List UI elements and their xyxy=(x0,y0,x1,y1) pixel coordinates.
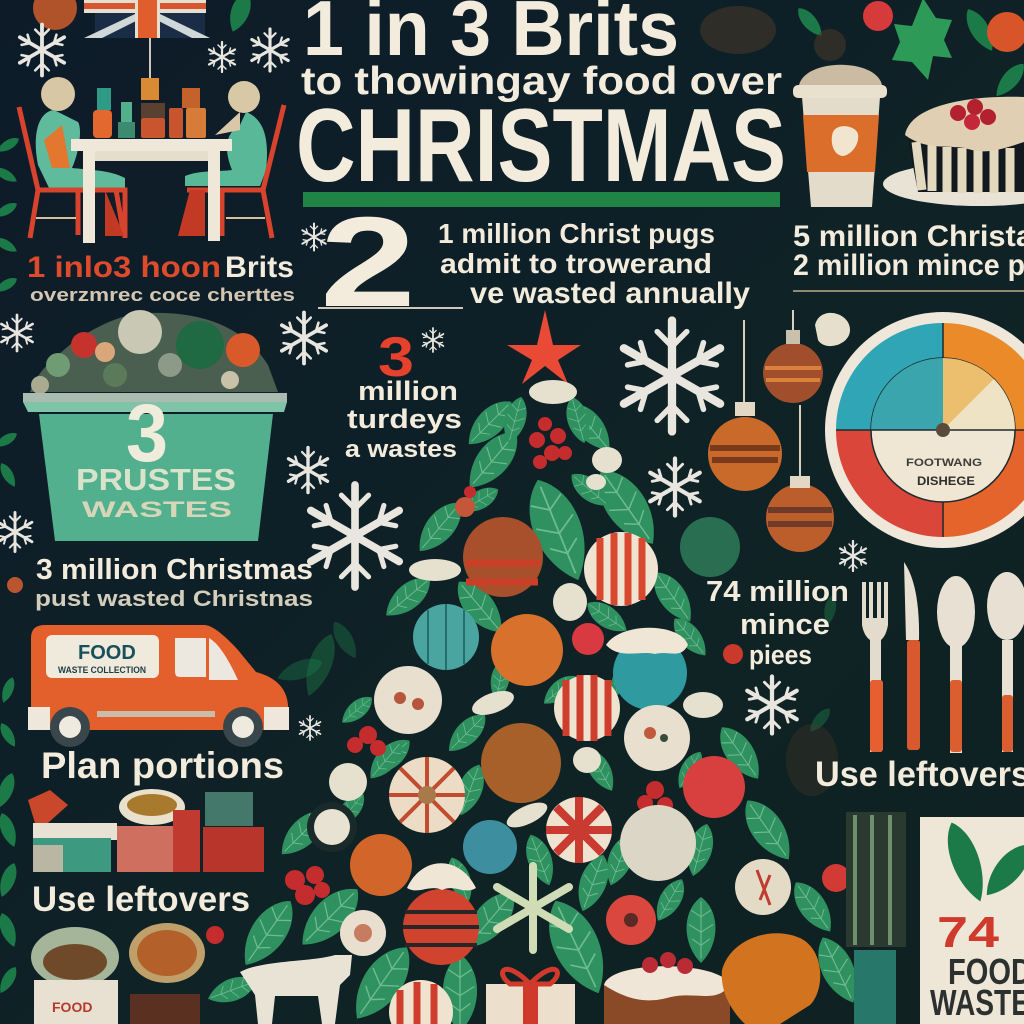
stat: 2 million christmas puddings: 1 million Christ pugs xyxy=(438,218,715,249)
illustration: roast turkey xyxy=(722,933,820,1024)
tree star xyxy=(507,310,581,384)
illustration: leftovers dishes xyxy=(31,923,224,1024)
title: CHRISTMAS xyxy=(296,88,786,204)
top white blooms xyxy=(329,380,723,832)
icon: cutlery xyxy=(862,562,1024,753)
illustration: green food waste bin xyxy=(23,310,287,541)
illustration: food dishes and shops xyxy=(28,789,264,872)
stat: 1 in 3 brits: overzmrec coce cherttes xyxy=(30,285,295,305)
illustration: green food waste bin: 3 xyxy=(126,388,168,479)
stat: 3 million turkeys: turdeys xyxy=(347,404,462,434)
stat: 1 in 3 brits xyxy=(27,251,295,305)
chart: pie gauge: FOOTWANG xyxy=(906,457,982,469)
illustration: orange food van: WASTE COLLECTION xyxy=(58,665,146,675)
stat: 3 million turkeys: million xyxy=(358,376,458,406)
illustration: orange food van: FOOD xyxy=(78,642,136,664)
stat: 1 in 3 brits: 1 inlo3 hoon xyxy=(27,251,221,284)
icon: coffee cup xyxy=(793,65,887,207)
tree foliage xyxy=(204,393,867,1024)
stat: 3 million turkeys: a wastes xyxy=(345,436,457,463)
title: to thowingay food over xyxy=(301,60,782,103)
stat: 74 million mince pies xyxy=(706,576,849,670)
snowflake icons xyxy=(0,24,866,740)
stat: 1 in 3 brits: Brits xyxy=(225,251,294,284)
icon: speckled holly cluster near title xyxy=(700,6,846,796)
left person xyxy=(36,77,125,190)
chart: pie gauge: DISHEGE xyxy=(917,474,975,488)
stat: 74 million mince pies: 74 million xyxy=(706,576,849,608)
right person xyxy=(185,81,267,186)
stat: 2 million christmas puddings xyxy=(318,191,750,334)
illustration: orange food van xyxy=(28,625,289,747)
illustration: wrapped gift xyxy=(486,969,575,1024)
stat: 74 million mince pies: mince xyxy=(740,609,830,641)
icon: large holly leaf top right xyxy=(892,0,952,80)
ornaments xyxy=(307,517,791,1024)
icon: hanging baubles xyxy=(708,310,850,552)
heading: plan portions: Plan portions xyxy=(41,745,284,786)
food heap xyxy=(30,310,278,394)
divider band xyxy=(303,192,780,207)
illustration: leftovers dishes: FOOD xyxy=(52,999,92,1015)
stat: right cropped text: 5 million Christa xyxy=(793,220,1024,253)
illustration: sheep xyxy=(240,955,352,1024)
stat: 3 million turkeys xyxy=(345,325,462,463)
poster: 74 food waste: 74 xyxy=(937,908,1000,957)
stat: 2 million christmas puddings: ve wasted annually xyxy=(470,277,750,310)
decorative jar column xyxy=(846,812,906,1024)
poster: 74 food waste xyxy=(920,817,1024,1024)
stat: 3 million turkeys: 3 xyxy=(378,325,414,388)
illustration: christmas pudding xyxy=(604,952,730,1024)
stat: 2 million christmas puddings: 2 xyxy=(320,191,416,334)
stat: 3 million christmas xyxy=(35,554,313,611)
stat: right cropped text xyxy=(793,220,1024,292)
stat: 3 million christmas: 3 million Christmas xyxy=(36,554,313,586)
berries xyxy=(285,417,673,905)
illustration: green food waste bin: PRUSTES xyxy=(76,462,236,497)
icon: union jack flag xyxy=(84,0,210,80)
chart: pie gauge xyxy=(825,312,1024,548)
stat: 3 million christmas: pust wasted Christnas xyxy=(35,586,313,611)
tree bottom snowflake xyxy=(497,866,569,950)
heading: use leftovers left: Use leftovers xyxy=(32,880,250,919)
stat: 74 million mince pies: piees xyxy=(749,640,812,670)
title xyxy=(296,0,786,204)
icon: christmas cake xyxy=(883,97,1024,206)
illustration: two people at a table xyxy=(19,77,284,243)
illustration: green food waste bin: WASTES xyxy=(82,497,232,522)
christmas tree xyxy=(204,310,867,1024)
stat: 2 million christmas puddings: admit to trowerand xyxy=(440,248,712,279)
